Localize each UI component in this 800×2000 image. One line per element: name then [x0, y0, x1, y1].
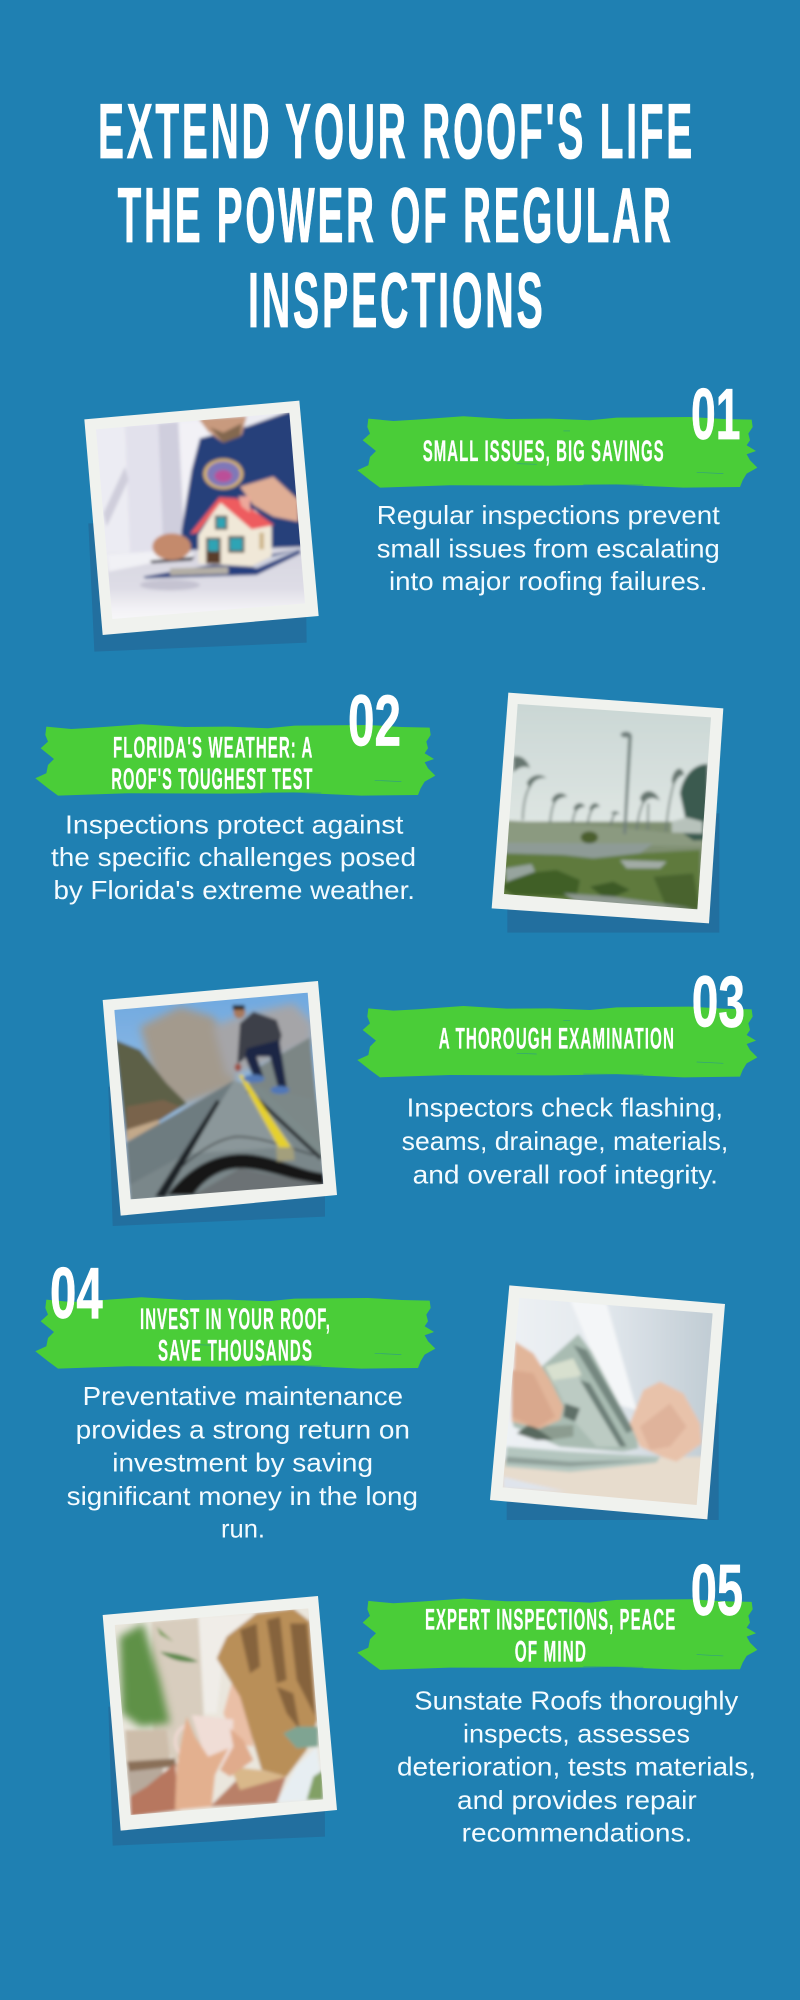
panel: step 4 photo	[490, 1285, 725, 1520]
panel: step 2 text	[35, 682, 435, 905]
body text: step 4: investment by saving	[112, 1448, 373, 1478]
body text: step 4: provides a strong return on	[76, 1414, 410, 1444]
body text: step 1: small issues from escalating	[377, 533, 720, 563]
body text: step 5: deterioration, tests materials,	[397, 1752, 756, 1782]
body text: step 4	[67, 1381, 418, 1544]
body text: step 3: seams, drainage, materials,	[402, 1126, 728, 1156]
body text: step 3: and overall roof integrity.	[413, 1159, 718, 1189]
body text: step 1	[377, 500, 721, 596]
panel: step 5 text	[357, 1551, 757, 1848]
banner: step 2	[35, 724, 435, 796]
panel: step 1 photo	[84, 401, 319, 652]
panel: step 3 text	[357, 963, 757, 1189]
number 04: 04	[50, 1254, 103, 1334]
banner: step 2: FLORIDA'S WEATHER: A	[113, 731, 314, 764]
body text: step 5: inspects, assesses	[463, 1719, 690, 1749]
body text: step 5	[397, 1685, 756, 1848]
panel: step 3 photo	[103, 981, 337, 1226]
body text: step 3	[402, 1093, 728, 1189]
banner: step 1	[357, 416, 757, 488]
banner: step 4: SAVE THOUSANDS	[158, 1335, 313, 1368]
body text: step 2: by Florida's extreme weather.	[54, 875, 415, 905]
panel: step 4 text	[35, 1254, 435, 1544]
banner: step 4	[35, 1297, 435, 1369]
body text: step 2: Inspections protect against	[65, 809, 404, 839]
body text: step 3: Inspectors check flashing,	[407, 1093, 723, 1123]
number 05: 05	[691, 1551, 743, 1631]
body text: step 4: Preventative maintenance	[83, 1381, 403, 1411]
body text: step 4: significant money in the long	[67, 1481, 418, 1511]
body text: step 5: Sunstate Roofs thoroughly	[414, 1685, 738, 1715]
banner: step 4: INVEST IN YOUR ROOF,	[140, 1303, 331, 1336]
body text: step 5: and provides repair	[457, 1785, 697, 1815]
number 03: 03	[692, 963, 745, 1043]
number 01: 01	[691, 375, 740, 455]
panel: step 2 photo	[492, 693, 723, 933]
body text: step 2: the specific challenges posed	[51, 842, 416, 872]
body text: step 4: run.	[221, 1514, 265, 1544]
body text: step 5: recommendations.	[462, 1818, 692, 1848]
panel: step 5 photo	[103, 1596, 337, 1846]
body text: step 2	[51, 809, 416, 905]
banner: step 2: ROOF'S TOUGHEST TEST	[111, 763, 313, 796]
panel: step 1 text	[357, 375, 757, 596]
banner: step 5	[357, 1599, 757, 1670]
title	[98, 87, 695, 344]
body text: step 1: Regular inspections prevent	[377, 500, 721, 530]
number 02: 02	[348, 682, 401, 762]
banner: step 5: OF MIND	[515, 1636, 587, 1669]
banner: step 3	[357, 1006, 757, 1077]
body text: step 1: into major roofing failures.	[389, 566, 707, 596]
